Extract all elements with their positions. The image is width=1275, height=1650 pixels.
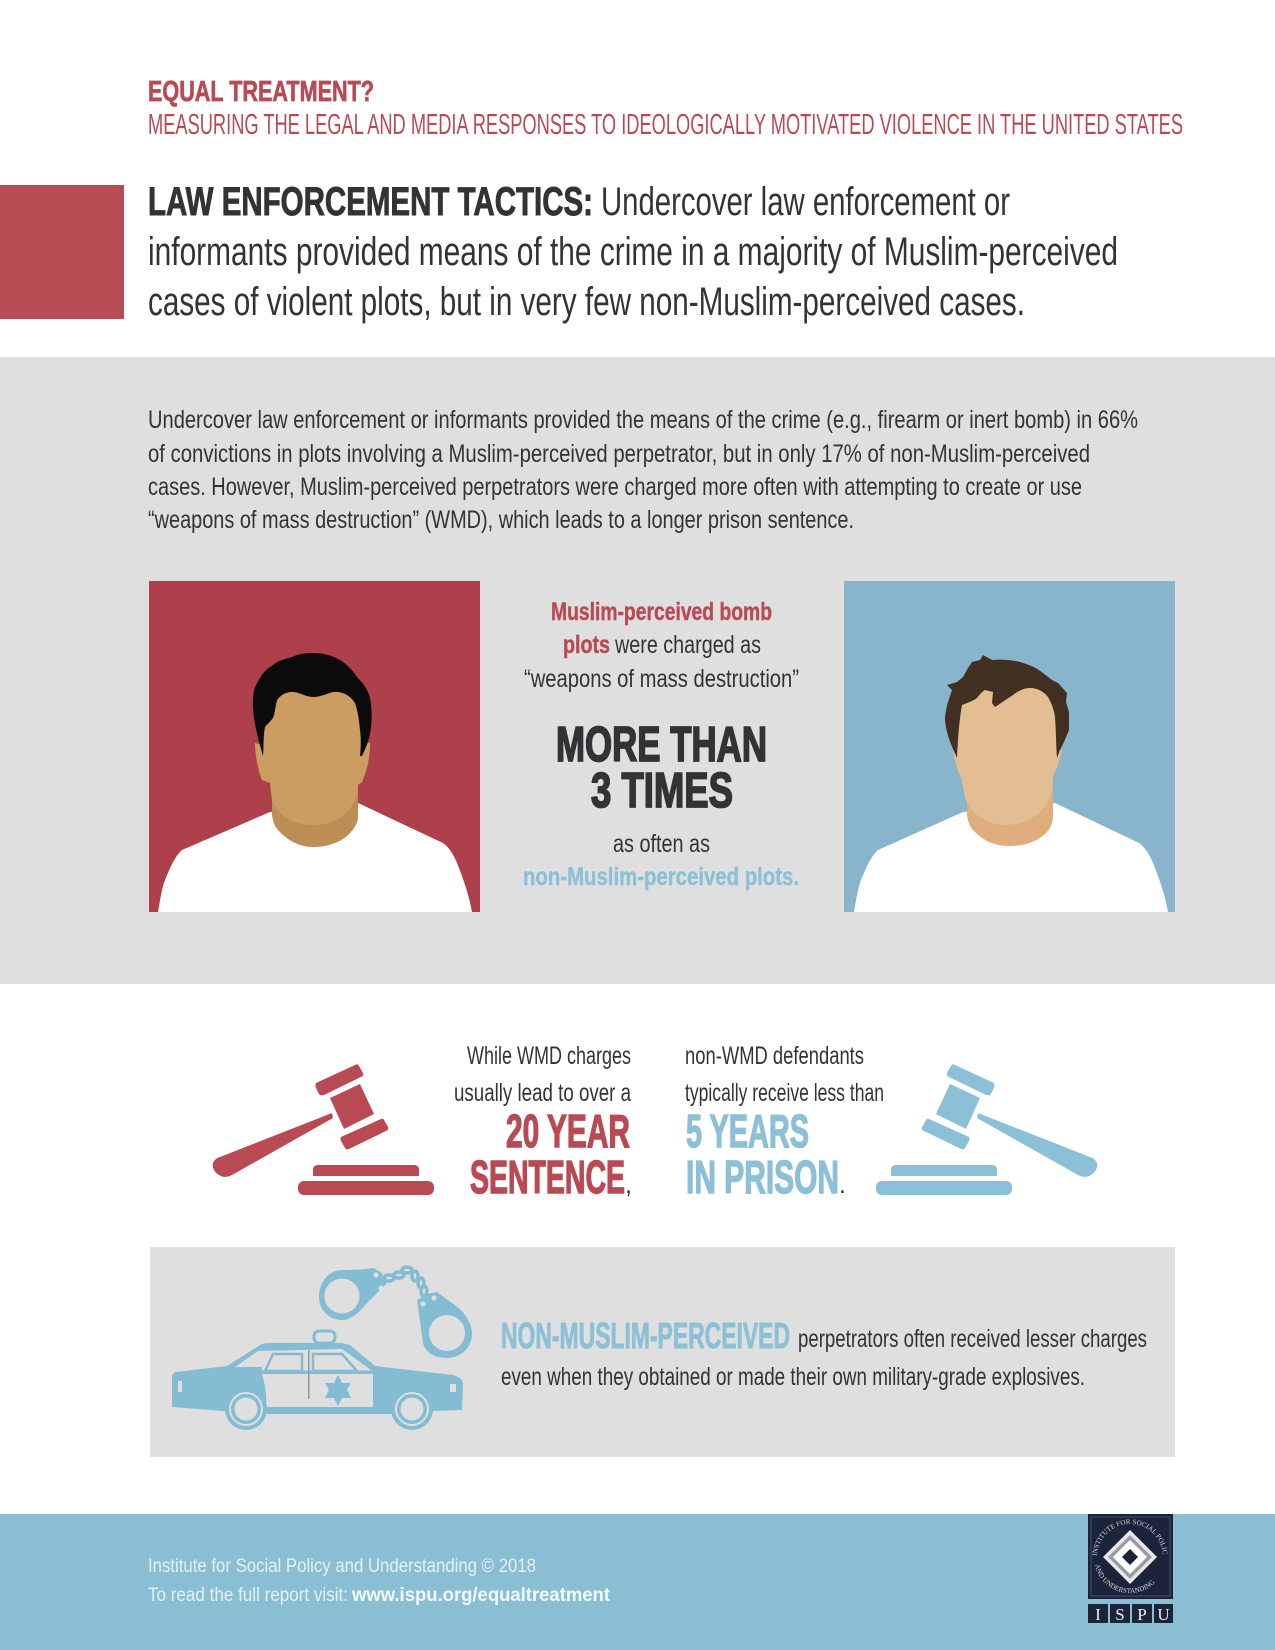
sentence text: WMD charges bbox=[454, 1042, 632, 1203]
sentence text: non-WMD defendants: . bbox=[839, 1171, 846, 1199]
central statistic callout: “weapons of mass destruction” bbox=[524, 665, 799, 693]
main heading: Undercover law enforcement or bbox=[601, 180, 1010, 224]
sentence text: WMD charges: usually lead to over a bbox=[454, 1079, 631, 1107]
footer text: Institute for Social Policy and Understanding © 2018 bbox=[148, 1556, 536, 1577]
portrait: non-Muslim-perceived man on blue bbox=[844, 581, 1175, 912]
panel: lesser charges bbox=[150, 1247, 1175, 1457]
central statistic callout: as often as bbox=[613, 830, 710, 858]
lesser charges text: even when they obtained or made their own military-grade explosives. bbox=[501, 1363, 1085, 1391]
logo: ISPU: S bbox=[1115, 1605, 1125, 1624]
footer text: www.ispu.org/equaltreatment bbox=[351, 1585, 611, 1606]
title: EQUAL TREATMENT? bbox=[148, 76, 374, 108]
sentence text: WMD charges: , bbox=[625, 1171, 632, 1199]
lesser charges text bbox=[501, 1315, 1147, 1391]
central statistic callout bbox=[523, 598, 799, 891]
icon: handcuffs bbox=[319, 1267, 472, 1358]
red accent block bbox=[0, 185, 124, 319]
sentence text: WMD charges: While WMD charges bbox=[467, 1042, 631, 1070]
intro paragraph: of convictions in plots involving a Muslim-perceived perpetrator, but in only 17% of non-Muslim-perceived bbox=[148, 440, 1090, 468]
sentence text: non-WMD defendants bbox=[685, 1042, 884, 1203]
sentence text: non-WMD defendants: non-WMD defendants bbox=[685, 1042, 864, 1070]
central statistic callout: plots bbox=[563, 631, 610, 659]
sentence text: WMD charges: SENTENCE bbox=[470, 1151, 625, 1203]
lesser charges text: NON-MUSLIM-PERCEIVED bbox=[501, 1315, 790, 1356]
sentence text: non-WMD defendants: typically receive less than bbox=[685, 1079, 884, 1107]
logo: ISPU: INSTITUTE FOR SOCIAL POLICY bbox=[1092, 1519, 1168, 1556]
footer text: To read the full report visit: bbox=[148, 1585, 348, 1606]
main heading: LAW ENFORCEMENT TACTICS: bbox=[148, 180, 593, 224]
footer text bbox=[148, 1556, 611, 1606]
logo: ISPU: P bbox=[1137, 1605, 1147, 1624]
panel: gray comparison section bbox=[0, 357, 1275, 984]
central statistic callout: MORE THAN bbox=[556, 718, 767, 772]
main heading bbox=[148, 180, 1118, 324]
portrait: Muslim-perceived man on red bbox=[149, 581, 480, 912]
sentence text: non-WMD defendants: 5 YEARS bbox=[686, 1105, 809, 1157]
report title block bbox=[148, 76, 1183, 141]
icon: red gavel bbox=[213, 1064, 434, 1195]
sentence text: non-WMD defendants: IN PRISON bbox=[686, 1151, 839, 1203]
intro paragraph: “weapons of mass destruction” (WMD), which leads to a longer prison sentence. bbox=[148, 506, 854, 534]
sentence text: WMD charges: 20 YEAR bbox=[506, 1105, 630, 1157]
intro paragraph bbox=[148, 406, 1138, 534]
icon: police car bbox=[172, 1331, 463, 1430]
logo: ISPU: AND UNDERSTANDING bbox=[1094, 1564, 1154, 1594]
central statistic callout: 3 TIMES bbox=[591, 764, 733, 818]
central statistic callout: non-Muslim-perceived plots. bbox=[523, 863, 799, 891]
logo: ISPU: U bbox=[1157, 1605, 1170, 1624]
logo: ISPU: I bbox=[1095, 1605, 1101, 1624]
icon: blue gavel bbox=[876, 1064, 1097, 1195]
lesser charges text: perpetrators often received lesser charges bbox=[798, 1325, 1147, 1353]
central statistic callout: Muslim-perceived bomb bbox=[551, 598, 772, 626]
central statistic callout: were charged as bbox=[614, 631, 761, 659]
